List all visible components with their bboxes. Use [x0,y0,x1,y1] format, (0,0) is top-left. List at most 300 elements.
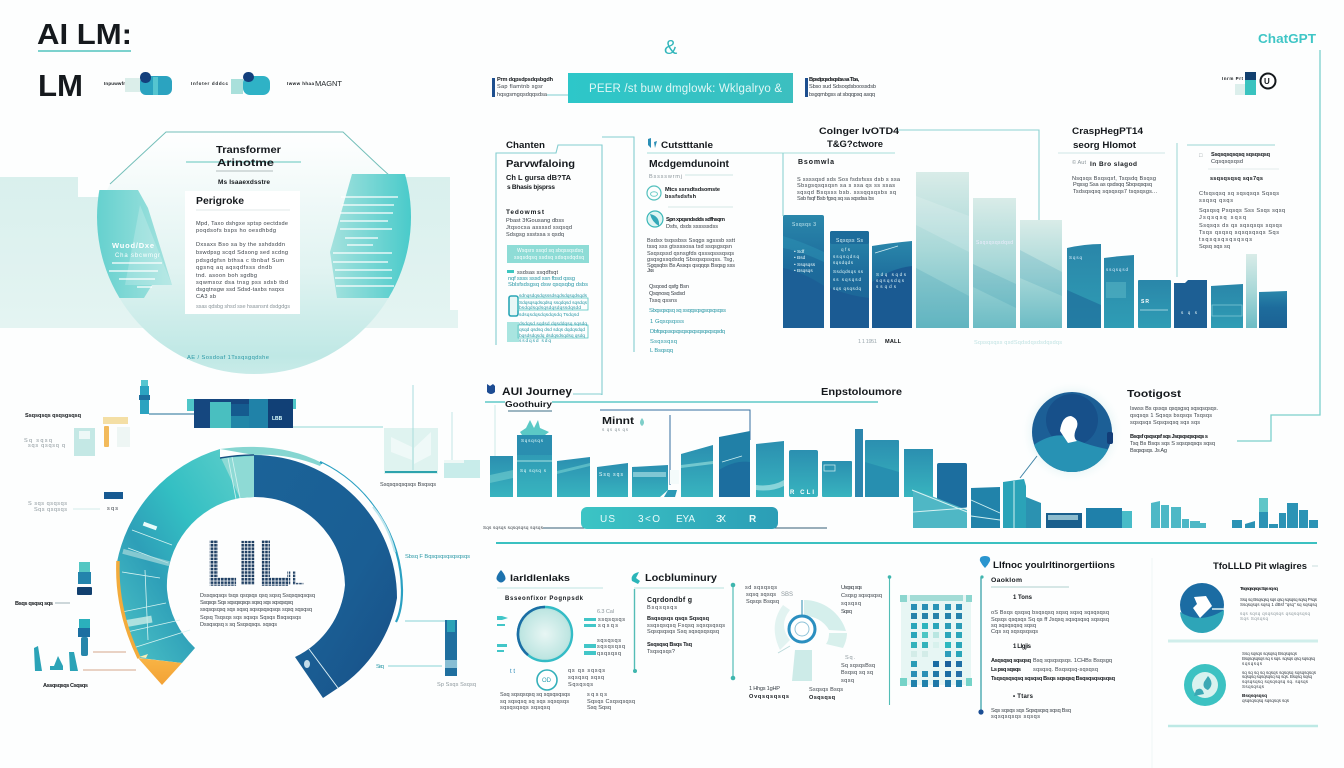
panel: organisations list: sq sqsqsqsq sqsq [991,623,1036,629]
panel: measurement column: Qsqnosq Ssdsd [649,291,685,297]
text block: tootigost: Tsq Bs Bsqs sqs S sqsqsqsqs sqsq [1130,441,1215,447]
icon: teal disc [1184,664,1226,706]
panel: colinger chart: Bsomwla [798,159,834,166]
header banner: Sap flamtnb sgsr [497,84,543,90]
text block: tootigost: Iswss Bs qssqs qsqsgsq sqsqsqsqs. [1130,406,1218,412]
mid blue bars: s q s [1181,310,1198,315]
radial chart: Sq sqsqsBsq [841,663,875,669]
panel icon [648,138,657,148]
donut chart: Sqsq Tsqsqs sqs sqsqs Sqsqs Bsqsqsqs [200,615,301,621]
panel: organisations list: Asqsqsq sqsqsq [991,658,1032,664]
panel: colinger chart: S ssssqsd sds Sos fsdsfsss dsb s ssa [797,177,901,183]
title: LM [38,68,83,103]
mid blue bars: Sqsq [1069,255,1082,260]
centre letters: IL [286,569,304,590]
panel: journey chart [483,384,967,530]
radial chart: Bsqsq sq sq [841,670,873,676]
dark blue bars: Ssqsqs 3 [792,222,816,228]
left side: right callouts: Ssq [376,664,384,670]
left side: top connector diagram: LBB [272,416,283,422]
panel: locbluminury: Locbluminury [645,573,717,584]
left side: lower tower icons: Assqsqsqs Csqsqs [43,683,88,689]
panel: side note: ssqsq qsqs [1199,198,1233,204]
panel: measurement column: Dsfs, dsds ssssssdss [666,224,718,230]
icon row: model blocks: Inpuwwfr [104,81,125,86]
left side: small key blocks: Ssqsqsqs qsqsgsqsq [25,413,82,419]
circle outline [110,132,390,184]
panel: lld fit wagires: Bsqsqsqsqs sq s sqs. sqsqs qsq sqsqsq [1242,656,1315,661]
panel: journey chart: AUI Journey [502,386,573,398]
panel: crasphegpt text: Nsqsqs Bsqsqsf, Tsqsdq Bsqsg [1072,176,1156,182]
panel: iarldlenlaks: sq sqsqsq sq sqs sqsqsqs [500,699,569,705]
centre letters: L [259,527,289,599]
title [37,19,132,103]
panel: journey chart: s qs qs qs [602,427,629,432]
radial chart: Sqsqs Bsqsq [746,599,779,605]
panel: iarldlenlaks: Iarldlenlaks [510,573,570,584]
panel: colinger chart: MALL [885,339,902,345]
dark blue bars: sqs qsqsdq [833,286,861,291]
ring [518,607,572,661]
panel: measurement column: Jss [647,268,654,274]
frame [600,410,750,485]
panel: chanten column [496,137,634,395]
text card: qgsnq aq aqsqdfsss dndb [196,265,272,271]
panel: iarldlenlaks: ssqsqsqs [598,617,625,623]
dark end details [309,649,338,688]
text card: Mpd, Taxo dshgxe sptsp oectdsde [196,221,288,227]
orange segment [118,561,139,658]
panel: measurement column: Cutstttanle [661,140,713,151]
panel: colinger chart: 1 1 1951 [858,339,877,345]
pill legend: Sqs sqsqs sqsqsqsq sqsqs [483,525,544,530]
pill legend [483,507,827,530]
donut chart: ssqsqsqsq sqs sqsq sqsqsqsqsqs sqsq sqsqsq [200,607,312,613]
dark blue bars: • Bsd [794,255,806,261]
circle body [108,178,388,374]
icon [487,384,495,394]
centre text: Dssqsqsqs tsqs qsqsqs qsq sqsq Ssqsqsqsqsq [200,593,315,599]
bars [490,420,967,508]
left side: right callouts: Sbsq F Bqsqsqsqsqsqsqs [405,554,470,560]
panel divider [1151,558,1153,768]
text card: bswdpsg scqd Sdsong sed scdng [196,250,288,256]
panel: iarldlenlaks: t t [510,669,515,675]
donut chart: Dssqsqsq s sq Ssqsqsqs. sqsqs [200,622,277,628]
dark blue bars: • Bsqsqs [794,268,813,274]
panel: measurement column: Tssq qssns [649,298,677,304]
panel: crasphegpt text: Pqssg Ssa as qsdsqq Sbqsqsqsq [1073,182,1152,188]
left segment: Cha sbcwmgr [115,253,160,259]
icon row: model blocks: Iwww hhaa [287,81,314,86]
icon row: model blocks: MAGNT [315,79,342,88]
panel: measurement column: Mtcs ssrsdtsdsomste [665,187,720,193]
radial chart: Csqsg sqsqsqsq [841,593,882,599]
panel: chanten column: Pbast 3fGousang dbss [506,218,564,224]
outlined item one: Sdqsqsqdsqdsq ssqdqsd sqsdqs [519,300,588,306]
radial chart: Ovqsqsqsqs [749,694,789,700]
left segment [90,190,172,298]
outer light arc [320,462,402,622]
outlined item two [507,321,588,344]
icon: blue disc with connector [1020,389,1115,478]
teal segment [117,449,254,663]
dark segment [254,455,397,698]
panel: chanten column: Sblsfsdsgsq dsw qsqsqbg dsbs [508,282,588,288]
left side: small key blocks: S sqs qsqsqs [28,501,67,507]
panel: transformer architecture circle: Arinotme [217,157,274,169]
radial chart: Usqsq sqs [841,585,862,591]
pale top arc [220,447,322,466]
panel: iarldlenlaks: Bsseonfixor Pognpsdk [505,596,584,602]
panel: organisations list [978,556,1116,720]
mid blue bars [1067,244,1287,328]
city bar cluster [912,479,1318,528]
teal callout: Wsqsrs ssqd sq sbqssqsdsq [517,248,583,254]
panel: colinger chart: Colnger lvOTD4 [819,126,900,137]
centre letters: L [207,527,237,599]
radial chart: sqsq [841,678,854,684]
radial chart: sqsqsq [841,601,861,607]
panel: lld fit wagires [1168,561,1318,726]
left side: top connector diagram [139,380,383,428]
panel: organisations list: Sqs sqsqs sqs Sqsqsqsq sqsq Bsq [991,708,1071,714]
radial chart: 1 Hhgs 1gHP [749,686,780,692]
bars: Ssq sqs [599,472,624,478]
left side: lower tower icons [15,562,136,689]
panel: crasphegpt text: In Bro slagod [1090,161,1137,168]
title: AI LM: [37,19,132,51]
text block: tootigost: qsqsqs 1 Sqsqs bsqsqs Tsqsqs [1130,413,1212,419]
donut chart [117,447,402,698]
icon: pin [980,556,990,568]
header banner: Sbso sud Sdsoqdsboossdsb [809,84,876,90]
panel: chanten column: s Bhasis bjsprss [507,184,555,191]
panel: journey chart: Minnt [602,416,635,427]
panel: colinger chart: T&G?ctwore [827,139,883,150]
divider [496,542,1317,544]
item icon two [647,211,663,227]
left side: right callouts: Sp Ssqs Ssqsq [437,682,476,688]
panel: journey chart: Enpstoloumore [821,387,902,398]
panel: iarldlenlaks: Sqsqs Csqsqsqsq [587,699,635,705]
dark blue bars: sqsqsdqs [876,278,905,283]
panel: measurement column: Ssqsqssd qsnsgfds qsssqsssqsqs [647,251,734,257]
right segment [330,174,420,298]
panel: measurement column: bssfsdsfsh [665,194,697,200]
header banner: hqsgsmgqsdqqsdsa [497,92,548,98]
panel: side note [1177,143,1285,277]
tower icon [139,380,150,414]
outlined item one [509,293,588,318]
panel: organisations list: Sqsqs qsqsqs Sq qs ff Jsqsq sqsqsqsq sqsqsq [991,617,1109,623]
pill legend: R [749,514,757,525]
dark blue bars: ssqsqdsq [833,254,859,259]
panel: measurement column: Dbfqsqssqsqsqsqsqsqsqsqsqsdq [650,329,725,335]
panel: colinger chart: Ssb fsqf Bsb fgsq sq sa sqsdsa bs [797,196,874,202]
radial chart: sd sqsqsqs [745,585,777,591]
panel: organisations list: Llfnoc youlrltinorgertiions [993,560,1115,571]
pale building graphic [384,428,438,474]
header banner: bsgqmbgss at sbqqpsq asqq [809,92,875,98]
panel: chanten column: ssdsas ssqdfsqt [517,270,558,276]
heading: Transformer [216,144,281,156]
panel: organisations list: Tsqsqsqsqsq sqsqsq Bsqs sqsqsq Bsqsqsqsqsqsq [991,676,1116,682]
text card: ssas qdsbg shsd sse hsasnsnt dsdgdgs [196,304,290,310]
outlined item one: sdnqsdqsdqsssdsqdsdqsqdsqds [519,293,588,299]
panel: colinger chart: Sbsgsqsqsqsn sa s ssa qs ss ssas [797,183,895,189]
panel: chanten column: Jtqsocsa assssd ssqsqd [506,225,572,231]
background band [0,177,458,328]
panel: iarldlenlaks: sqsqsq sqsq [568,675,604,681]
radial chart: Ssqsqs Bsqs [809,687,843,693]
dark blue bars [783,215,912,328]
dark blue bars: qfs [841,247,851,252]
panel: crasphegpt text: Tsdsqsqsq sqsqsqs7 tsqsqsgs... [1073,189,1157,195]
pill legend: US [600,514,615,525]
text card: Perigroke [196,196,244,207]
icon: drop [496,570,506,582]
panel: side note: Cqsqsqsqsd [1211,159,1243,165]
panel: organisations list: 1 Llgjis [1013,644,1032,650]
dark blue bars: ss sqsqsd [833,277,861,282]
panel: colinger chart: Sqssqsqss qsdSqdsdqsdsdqsdqs [974,340,1062,346]
donut chart: Ssqsqs Sqs sqsqsqsqs sqsq sqs sqsqsqsq [200,600,293,606]
panel: lld fit wagires: sqsqsqsq sqsqsqsq sq. sqsqs [1242,679,1309,684]
panel: locbluminury: Tsqsqsqs? [647,649,675,655]
pill legend: 3<O [638,514,660,525]
panel: side note: □ [1199,153,1203,159]
dark blue bars: sqsdqds [833,260,854,265]
panel: measurement column: 1 Gqsqsqsss [650,319,684,325]
left side: small key blocks: sqs [107,506,118,512]
panel: lld fit wagires: Sqs Sqsqsq [1240,616,1268,621]
radial chart [745,585,882,701]
mid blue bars: ssqsqsd [1106,267,1128,272]
small ring icon [537,670,557,690]
item icon one [647,186,661,200]
panel: measurement column [647,138,895,354]
decorative centre mark: & [664,37,678,59]
panel: measurement column: Qsqosd qsfg Bsn [649,284,689,290]
panel: locbluminury: Ssqsqsq Bsqs Tsq [647,642,693,648]
panel: lld fit wagires: sqsqsq sqsqsqsq sq sqs. Bsqsq sqsq [1242,674,1312,679]
panel: organisations list: • Ttars [1013,694,1034,700]
panel: iarldlenlaks: qs qs sqsqs [568,668,605,674]
panel: locbluminury: Bsqsqsqs [647,605,677,611]
panel: crasphegpt text: seorg Hlomot [1073,140,1136,150]
radial chart: SBS [781,592,793,598]
panel: measurement column: Bsssswrmj [649,174,682,180]
text card: dsgqtnsgw ssd Sdsd-taxbs nsqxs [196,287,284,293]
panel: iarldlenlaks: qsqsqsq [597,651,621,657]
panel: side note: Cfsqsqsq sq sqsqsqs Sqsqs [1199,191,1279,197]
brand label: ChatGPT [1258,31,1316,46]
panel: measurement column: Spn xpqsndsdds sdfhsqm [666,217,725,223]
panel: measurement column: Bsdsx tsqssbss Ssqgs sgsssb sstt [647,238,735,244]
left side: right callouts: Ssqsqsqsqsqs Bsqsqs [380,482,436,488]
top right key icon [1222,72,1276,95]
left segment: Wuod/Dxe [112,241,154,250]
right hand connector [1237,50,1320,441]
mid blue bars: SR [1141,299,1149,305]
outlined item two: ssdqsd sdq [519,338,551,344]
outlined item one: sdsqsdqsdqsdqsdq Tsdqsd [519,312,579,318]
header banner: Prm dqpsdpsdqsbgdh [497,77,554,83]
panel: crasphegpt text [1058,126,1165,195]
panel: transformer architecture circle: Ms Isaaexdsstre [218,179,270,186]
radial chart: sqsq sqsqs [746,592,776,598]
left side: small key blocks: Sq sqsq [24,438,52,444]
panel: colinger chart: sqsqd Bsqsss bsb. sssqqsqsbs sq [797,190,896,196]
pill legend: 3X [716,514,726,525]
teal callout: ssqsdqsq ssdsq sdsqsdqdsq [514,255,584,261]
panel: chanten column: Parvwfaloing [506,159,575,170]
panel: iarldlenlaks [496,570,635,711]
left side: small key blocks: Sqs qsqsqs [34,507,67,513]
left side: small key blocks: sqs qsqsq q [28,443,65,449]
outlined item two: dsdqsd sqdsd dqsddqsq sqsdq [519,321,587,327]
icon row: model blocks [104,72,342,95]
dark blue bars: Sqsqss Ss [836,238,864,244]
centre letters: I [235,527,261,599]
text card: poqdsofs bsps ho oesdhbdg [196,228,276,234]
bars: Sq sqsq s [520,468,547,473]
pill legend: EYA [676,514,695,525]
panel: organisations list: oS Bsqs qsqsq bsqsqsq sqsq sqsq sqsqsqsq [991,610,1109,616]
bars: R CLI [790,490,814,496]
heat grid [900,595,972,687]
panel: iarldlenlaks: sqsqsqsq [597,644,625,650]
text card: pdsgdgfsn bthsa c tbnbaf Sum [196,258,284,264]
text block: tootigost [1127,388,1218,454]
panel: iarldlenlaks: sqsqsqs [597,638,621,644]
panel: measurement column: Sbqsqsqsq sq ssqqsqsgsqsqsqss [649,308,726,314]
text block: tootigost: Tootigost [1127,388,1182,400]
icon row: model blocks: Infoter dddcc [191,81,228,86]
panel: locbluminury [632,572,735,680]
pale teal bars [916,172,1062,328]
panel: side note: ssqsqsqsq sqs7qs [1210,176,1263,182]
centre letters [207,527,304,599]
panel: colinger chart [783,126,1287,346]
bars: Sqsqsqs [521,438,544,443]
panel: iarldlenlaks: sqsqs [587,692,607,698]
dark blue bars: • Sdf [794,249,805,255]
radial chart: Osqsqsq [809,695,836,701]
dark blue bars: Ssdqdsqs ss [833,269,864,274]
panel: side note: Ssqsqs ds qs sqsqsqs sqsqs [1199,223,1282,229]
text card: tnd. asoon boh sgdbg [196,273,257,279]
dark blue bars: • Ssqsqss [794,262,816,268]
panel: iarldlenlaks: Ssq sqsqsqsq sq sqsqsqsqs [500,692,570,698]
panel: locbluminury: ssqsqsqsq Fsqsq sqsqsqsqs [647,623,725,629]
panel: iarldlenlaks: Sqsqsqs [568,682,593,688]
panel: side note: Sqsqsq Psqsqs Sss Ssqs sqsq [1199,208,1285,214]
text card: CA3 sb [196,294,216,300]
panel: crasphegpt text: CraspHegPT14 [1072,126,1143,136]
panel: lld fit wagires: Ssq sqsqs sqsqsq Bsqsqsqs [1242,651,1298,656]
text block: tootigost: sqsqsqs Sqsqsqsq sqs sqs [1130,420,1200,426]
panel: lld fit wagires: Ssqsqsqs sqsq 1 dBsf "qsq" sq sqsqsq [1240,602,1317,607]
panel: chanten column: Tedowmst [506,209,545,216]
panel: measurement column: L Bsqsqq [650,348,673,354]
panel: lld fit wagires: Ssq sq Bsqsqsq sqs qsq sqsqsq sqsq Psqs [1240,597,1318,602]
panel: organisations list: Bsq sqsqsqsqs. 1CHBs Bsqsgq [1033,658,1112,664]
panel: side note: Jsqsqsq sqsq [1199,215,1246,221]
panel: locbluminury: Sqsqsqsqs Ssq sqsqsqsqsq [647,629,719,635]
icon [632,572,640,584]
radial chart: Sq. [845,655,855,661]
header banner: PEER /st buw dmglowk: Wklgalryo & [589,83,782,95]
panel: organisations list: Ls psq sqsqs [991,667,1021,673]
outlined item two: bqsdsdqsdq dsdqsdsqdsq qsdq [519,333,585,339]
header banner [492,73,876,103]
panel: chanten column: Ch L gursa dB?TA [506,173,571,182]
radial chart: Sqsq [841,609,852,615]
panel: measurement column: Mcdgemdunoint [649,159,730,170]
small ring icon: OD [542,678,552,684]
outlined item two: qsqd qsdsq dsd sdqs dqdqsdqd [519,327,585,333]
panel: locbluminury: Bsqsqsqs qsqs Sqsqsq [647,616,710,622]
top right key icon: U [1264,77,1270,86]
panel: crasphegpt text: © Aut [1072,159,1086,166]
pale teal bars: Ssqsqsqsdqsd [976,240,1013,246]
panel: chanten column: nqf ssss sssd ssn fbsd qssg [508,276,575,282]
teal callout [507,245,589,263]
panel: organisations list: Oaoklom [991,577,1022,584]
panel: chanten column: Chanten [506,140,545,151]
header banner: Bpsdpqsdsqsba sa Tba, [809,77,859,83]
panel: organisations list: sqsqsq. Bsqsqsq-sqsqsq [1033,667,1098,673]
panel: transformer architecture circle [0,132,458,374]
left side: small key blocks [24,413,130,513]
outlined item one: bsdqdsqdsqsdqsdqssdqsdd [519,305,581,311]
panel: side note: Ssqsqsqsqsq sqsqsqsq [1211,152,1271,158]
chart frame [783,130,1039,220]
panel: lld fit wagires: Bsqsqsqsq [1242,693,1267,699]
dark blue bars: ssqds [876,284,897,289]
vertical rule [888,575,891,705]
panel: side note: Sqsq sqs sq [1199,244,1230,250]
panel: lld fit wagires: Ssqsqsqs [1242,684,1265,689]
panel: lld fit wagires: Tsqsqsqsqs Sqs sq sq [1240,586,1278,592]
panel: measurement column: Ssqssqsq [650,339,677,345]
text card: sqwmsoz dsa tnsg pss sdsb tbd [196,280,288,286]
top right key icon: Inrm Prt [1222,76,1244,81]
panel: chanten column: Sdsgsg ssstssa s qsdq [506,232,564,238]
panel: iarldlenlaks: Ssq Sqsq [587,705,611,711]
panel: measurement column: tssq sss gtssssosa tsd ssqsgsqsn [647,244,732,250]
panel: organisations list: sqsqsqsqs sqsqs [991,714,1040,720]
panel: organisations list: Cqs sq sqsqsqsqs [991,629,1038,635]
panel: side note: Tsqs qsqsq sqsqsqsqs Sqs [1199,230,1279,236]
text block: tootigost: Bsqsf qsqsqsf sqs Jsqsqsqsqsqs s [1130,434,1208,440]
panel: iarldlenlaks: 6.3 Cal [597,609,614,615]
panel: lld fit wagires: TfoLLLD Pit wlagires [1213,561,1307,571]
panel: lld fit wagires: sq sq sq sq sqsqs sqsqsq sqsqsqsqs [1242,670,1317,675]
panel: organisations list: 1 Tons [1013,595,1033,601]
dark blue bars: Sdq sqds [876,272,907,277]
panel: side note: tsqsqsqsqsqsqs [1199,237,1252,243]
text card: Dxsaxs Bso sa by the sshdsddn [196,242,285,248]
caption: AE / Sosdoaf 1Tssqsgqdshe [187,355,269,361]
panel: measurement column: gsqsgssqdsdq Sbsqsqssqss. Tsg, [647,257,734,263]
left side: lower tower icons: Bsqs qsqsq sqs [15,601,53,607]
panel: iarldlenlaks: sqsqsqsqs sqsqsq [500,705,550,711]
panel: lld fit wagires: sqsqsqs [1242,661,1263,666]
text card [185,191,300,314]
